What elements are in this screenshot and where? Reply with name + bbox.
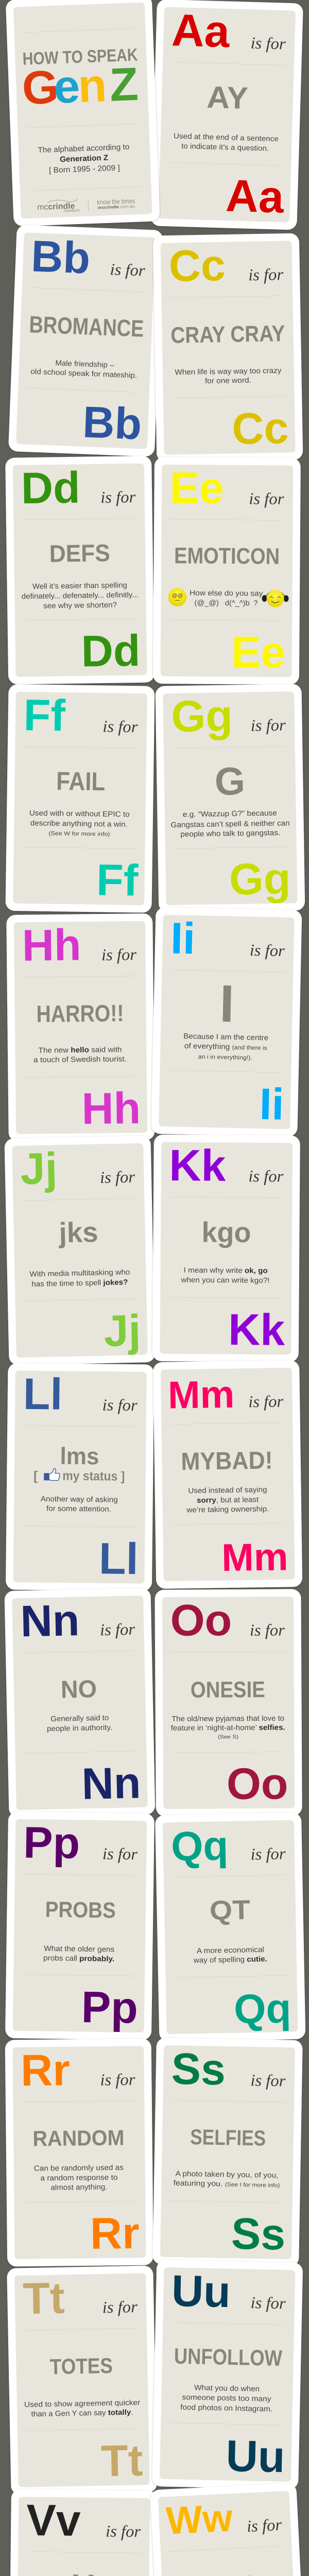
big letter top: Kk [169, 1141, 226, 1191]
big letter bottom: Rr [90, 2209, 140, 2259]
definition: (See W for more info) [48, 831, 110, 838]
is for: is for [102, 2297, 138, 2316]
word subtitle: like my status: my status ] [62, 1469, 125, 1484]
big letter top: Gg [171, 691, 233, 741]
big letter top: Ss [171, 2044, 226, 2094]
inner panel [159, 914, 295, 1129]
card: Qq [155, 1812, 305, 2042]
definition: Well it’s easier than spelling [32, 581, 127, 591]
is for: is for [110, 260, 146, 280]
inner panel [163, 691, 298, 905]
big letter bottom: Hh [81, 1083, 141, 1133]
definition: sorry, but at least [197, 1496, 259, 1505]
card: Pp [5, 1811, 154, 2040]
is for: is for [248, 1392, 284, 1411]
word: UNFOLLOW [174, 2344, 283, 2371]
is for: is for [100, 487, 136, 506]
big letter bottom: Aa [225, 170, 285, 223]
inner panel [161, 1368, 295, 1581]
definition: when you can write kgo?! [180, 1276, 270, 1285]
definition [34, 2164, 124, 2192]
definition: a touch of Swedish tourist. [33, 1055, 127, 1064]
definition: see why we shorten? [43, 601, 117, 611]
definition [24, 2399, 141, 2419]
card: Rr [5, 2039, 153, 2266]
logo: mccrindle: mccrindle .com.au [97, 204, 135, 210]
definition: than a Gen Y can say totally. [31, 2409, 133, 2418]
definition [173, 2170, 280, 2189]
inner panel [162, 1597, 295, 1809]
inner panel [163, 1820, 298, 2034]
definition [180, 1266, 270, 1285]
definition: someone posts too many [182, 2393, 271, 2403]
inner panel [12, 1143, 148, 1358]
card: Kk [152, 1134, 300, 1362]
word: TOTES [49, 2353, 113, 2379]
definition: describe anything not a win. [30, 819, 128, 829]
is for: is for [248, 265, 284, 284]
definition: definately... defenately... definitly... [22, 591, 139, 601]
definition: Another way of asking [41, 1495, 118, 1504]
definition [33, 1046, 127, 1064]
big letter top: Mm [167, 1372, 235, 1417]
definition: How else do you say [190, 589, 263, 598]
definition: featuring you. (See I for more info) [173, 2179, 280, 2189]
definition: A more economical [197, 1946, 264, 1955]
inner panel [13, 463, 147, 677]
word subtitle: like my status: [ [33, 1469, 38, 1483]
is for: is for [102, 1844, 138, 1863]
card: Mm [153, 1360, 302, 1589]
definition: Because I am the centre [183, 1032, 268, 1042]
is for: is for [250, 2071, 286, 2090]
is for: is for [102, 717, 138, 736]
definition: Used at the end of a sentence [174, 132, 279, 143]
inner panel [14, 2273, 150, 2487]
big letter bottom: Kk [228, 1305, 285, 1355]
card: Cc [153, 233, 303, 462]
definition: feature in ‘night-at-home’ selfies. [171, 1724, 285, 1733]
is for: is for [100, 1167, 135, 1187]
inner panel [16, 2497, 150, 2576]
big letter top: Ll [23, 1369, 63, 1419]
word: PROBS [45, 1897, 116, 1923]
card: Bb [8, 225, 163, 457]
word: EMOTICON [174, 543, 280, 569]
definition [171, 1715, 285, 1740]
inner panel [14, 921, 147, 1134]
definition [186, 1486, 269, 1515]
card: Hh [6, 913, 155, 1142]
intro text: The alphabet according to [38, 143, 130, 155]
card: title [6, 0, 160, 227]
heading: Gen Z: n [77, 59, 108, 112]
definition: probs call probably. [43, 1954, 114, 1963]
definition: Generally said to [50, 1714, 109, 1723]
card: Aa [150, 0, 303, 230]
card: Jj [4, 1136, 156, 1365]
big letter bottom: Ff [96, 855, 139, 905]
big letter top: Jj [20, 1144, 58, 1194]
is for: is for [250, 1620, 285, 1639]
big letter top: Bb [30, 231, 91, 283]
is for: is for [249, 489, 284, 508]
big letter top: Vv [26, 2496, 81, 2546]
word: QT [209, 1895, 250, 1926]
word: AY [207, 80, 249, 115]
word: G [214, 759, 246, 804]
definition: has the time to spell jokes? [31, 1278, 128, 1289]
is for: is for [250, 1844, 286, 1863]
is for: is for [250, 2293, 286, 2312]
definition [21, 581, 139, 611]
inner panel [16, 232, 156, 449]
definition [175, 367, 282, 386]
inner panel [158, 7, 296, 223]
definition: old school speak for mateship. [30, 368, 137, 380]
definition: way of spelling cutie. [193, 1955, 267, 1965]
big letter bottom: Ss [231, 2209, 286, 2259]
big letter top: Ee [169, 463, 224, 513]
big letter bottom: Ii [259, 1079, 285, 1129]
inner panel [13, 1819, 147, 2032]
inner panel [160, 2045, 295, 2259]
is for: is for [250, 33, 286, 53]
is for: is for [246, 2515, 282, 2535]
card: Gg [155, 684, 305, 913]
is for: is for [100, 1620, 135, 1639]
logo: mccrindle: research [64, 208, 80, 213]
inner panel [160, 1142, 293, 1354]
big letter top: Dd [21, 463, 80, 513]
definition [40, 1495, 118, 1514]
big letter bottom: Jj [104, 1306, 141, 1356]
card: Ee [153, 457, 301, 685]
definition [30, 358, 138, 380]
big letter top: Aa [171, 4, 231, 57]
big letter bottom: Dd [81, 626, 141, 676]
big letter top: Rr [21, 2045, 70, 2095]
inner panel [158, 2491, 299, 2576]
definition: of everything (and there is [184, 1042, 267, 1052]
big letter bottom: Qq [233, 1985, 291, 2032]
inner panel [13, 1370, 147, 1584]
big letter top: Ff [23, 690, 66, 740]
card: Ww [150, 2483, 307, 2576]
word: SELFIES [190, 2125, 266, 2150]
definition: for some attention. [46, 1505, 111, 1514]
inner panel [13, 692, 147, 905]
definition: A photo taken by you, of you, [175, 2170, 279, 2180]
big letter top: Qq [170, 1823, 229, 1870]
inner panel [160, 465, 293, 677]
definition: I mean why write ok, go [184, 1266, 268, 1275]
word subtitle: like my status [33, 1468, 125, 1484]
card: Vv [9, 2489, 158, 2576]
word: FAIL [56, 767, 106, 796]
definition: almost anything. [50, 2183, 107, 2192]
definition: Used to show agreement quicker [24, 2399, 140, 2409]
big letter top: Cc [168, 241, 226, 291]
is for: is for [248, 1166, 284, 1185]
big letter bottom: Ll [99, 1534, 139, 1584]
heading: how to speak: HOW TO SPEAK [22, 45, 139, 69]
big letter bottom: Bb [82, 397, 143, 449]
big letter bottom: Mm [221, 1535, 288, 1579]
definition: (@_@) d(^_^)b ? [195, 599, 258, 607]
definition [43, 1945, 114, 1963]
heading: Gen Z: e [53, 60, 81, 113]
definition [170, 809, 290, 839]
logo: mccrindle: know the times [97, 197, 135, 206]
definition [29, 1268, 130, 1289]
big letter bottom: Ee [231, 628, 286, 677]
logo: mccrindle [37, 197, 135, 214]
big letter bottom: Pp [81, 1982, 138, 2033]
definition: When life is way way too crazy [175, 367, 282, 377]
is for: is for [106, 2521, 141, 2540]
card: Ll [6, 1363, 154, 1591]
definition [183, 1032, 268, 1061]
definition: Can be randomly used as [34, 2164, 124, 2173]
inner panel [13, 2, 152, 219]
word: DEFS [49, 539, 110, 567]
definition: The new hello said with [38, 1046, 122, 1055]
definition: people who talk to gangstas. [180, 829, 280, 839]
definition [46, 1714, 112, 1733]
word: RANDOM [32, 2125, 125, 2150]
card: Ff [5, 684, 155, 913]
definition: With media multitasking who [29, 1268, 130, 1279]
definition: Male friendship – [55, 359, 115, 370]
definition: a random response to [40, 2174, 117, 2182]
word: CRAY CRAY [170, 321, 285, 348]
inner panel [161, 241, 296, 455]
big letter top: Hh [22, 920, 81, 971]
icon: dizzy emoticon: @@ [172, 592, 183, 599]
big letter top: Ww [165, 2496, 234, 2543]
definition: Used with or without EPIC to [29, 809, 130, 819]
word: BROMANCE [29, 311, 144, 342]
definition: Gangstas can’t spell & neither can [170, 819, 290, 829]
word: NO [60, 1675, 97, 1704]
definition [173, 132, 279, 153]
is for: is for [250, 716, 286, 735]
card: Uu [152, 2260, 303, 2489]
word: jks [58, 1216, 98, 1249]
big letter top: Uu [171, 2266, 231, 2317]
definition [190, 589, 263, 607]
big letter top: Nn [20, 1596, 80, 1646]
definition: people in authority. [47, 1723, 112, 1733]
big letter bottom: Gg [229, 854, 291, 905]
big letter bottom: Oo [227, 1759, 288, 1809]
intro text: [ Born 1995 - 2009 ] [49, 163, 120, 175]
heading: Gen Z: Z [109, 58, 139, 111]
big letter bottom: Uu [226, 2431, 285, 2482]
definition [180, 2383, 273, 2414]
card: Oo [154, 1589, 302, 1817]
intro text: Generation Z [60, 154, 108, 164]
definition: The old/new pyjamas that love to [171, 1715, 284, 1723]
big letter top: Ii [170, 913, 196, 963]
definition: we’re taking ownership. [186, 1505, 269, 1515]
definition: for one word. [205, 377, 251, 385]
word: kgo [201, 1216, 251, 1248]
card: Ii [151, 907, 302, 1137]
word: MYBAD! [181, 1447, 273, 1476]
definition: Used instead of saying [188, 1486, 267, 1495]
card: Nn [4, 1588, 156, 1818]
logo: mccrindle: mccrindle [37, 202, 75, 212]
heading: Gen Z: G [21, 61, 60, 114]
big letter bottom: Cc [232, 403, 289, 454]
word: I [219, 974, 235, 1033]
definition: What the older gens [44, 1945, 114, 1954]
definition: (See S) [218, 1734, 238, 1740]
definition: e.g. “Wazzup G?” because [183, 809, 277, 819]
intro text [38, 143, 130, 175]
big letter top: Tt [22, 2274, 65, 2324]
big letter top: Pp [23, 1818, 80, 1868]
word: HARRO!! [36, 999, 124, 1027]
big letter top: Oo [170, 1596, 232, 1646]
big letter bottom: Tt [100, 2436, 143, 2486]
is for: is for [100, 2070, 135, 2089]
definition: food photos on Instagram. [180, 2403, 272, 2414]
inner panel [12, 2046, 146, 2259]
definition: What you do when [194, 2384, 260, 2394]
icon: dizzy emoticon [168, 588, 187, 606]
word: ONESIE [191, 1677, 265, 1703]
definition [193, 1946, 267, 1965]
card: Tt [7, 2265, 158, 2495]
inner panel [12, 1596, 148, 1810]
word: lms [60, 1443, 99, 1469]
big letter bottom: Nn [81, 1758, 141, 1809]
inner panel [160, 2267, 295, 2482]
definition: to indicate it’s a question. [181, 142, 269, 153]
is for: is for [102, 1395, 138, 1414]
card: Dd [5, 456, 154, 685]
card: Ss [152, 2038, 303, 2267]
icon: headphones emoticon [262, 589, 289, 607]
definition [29, 809, 130, 838]
is for: is for [249, 941, 285, 960]
is for: is for [101, 945, 137, 964]
definition: an i in everything!). [198, 1054, 252, 1061]
